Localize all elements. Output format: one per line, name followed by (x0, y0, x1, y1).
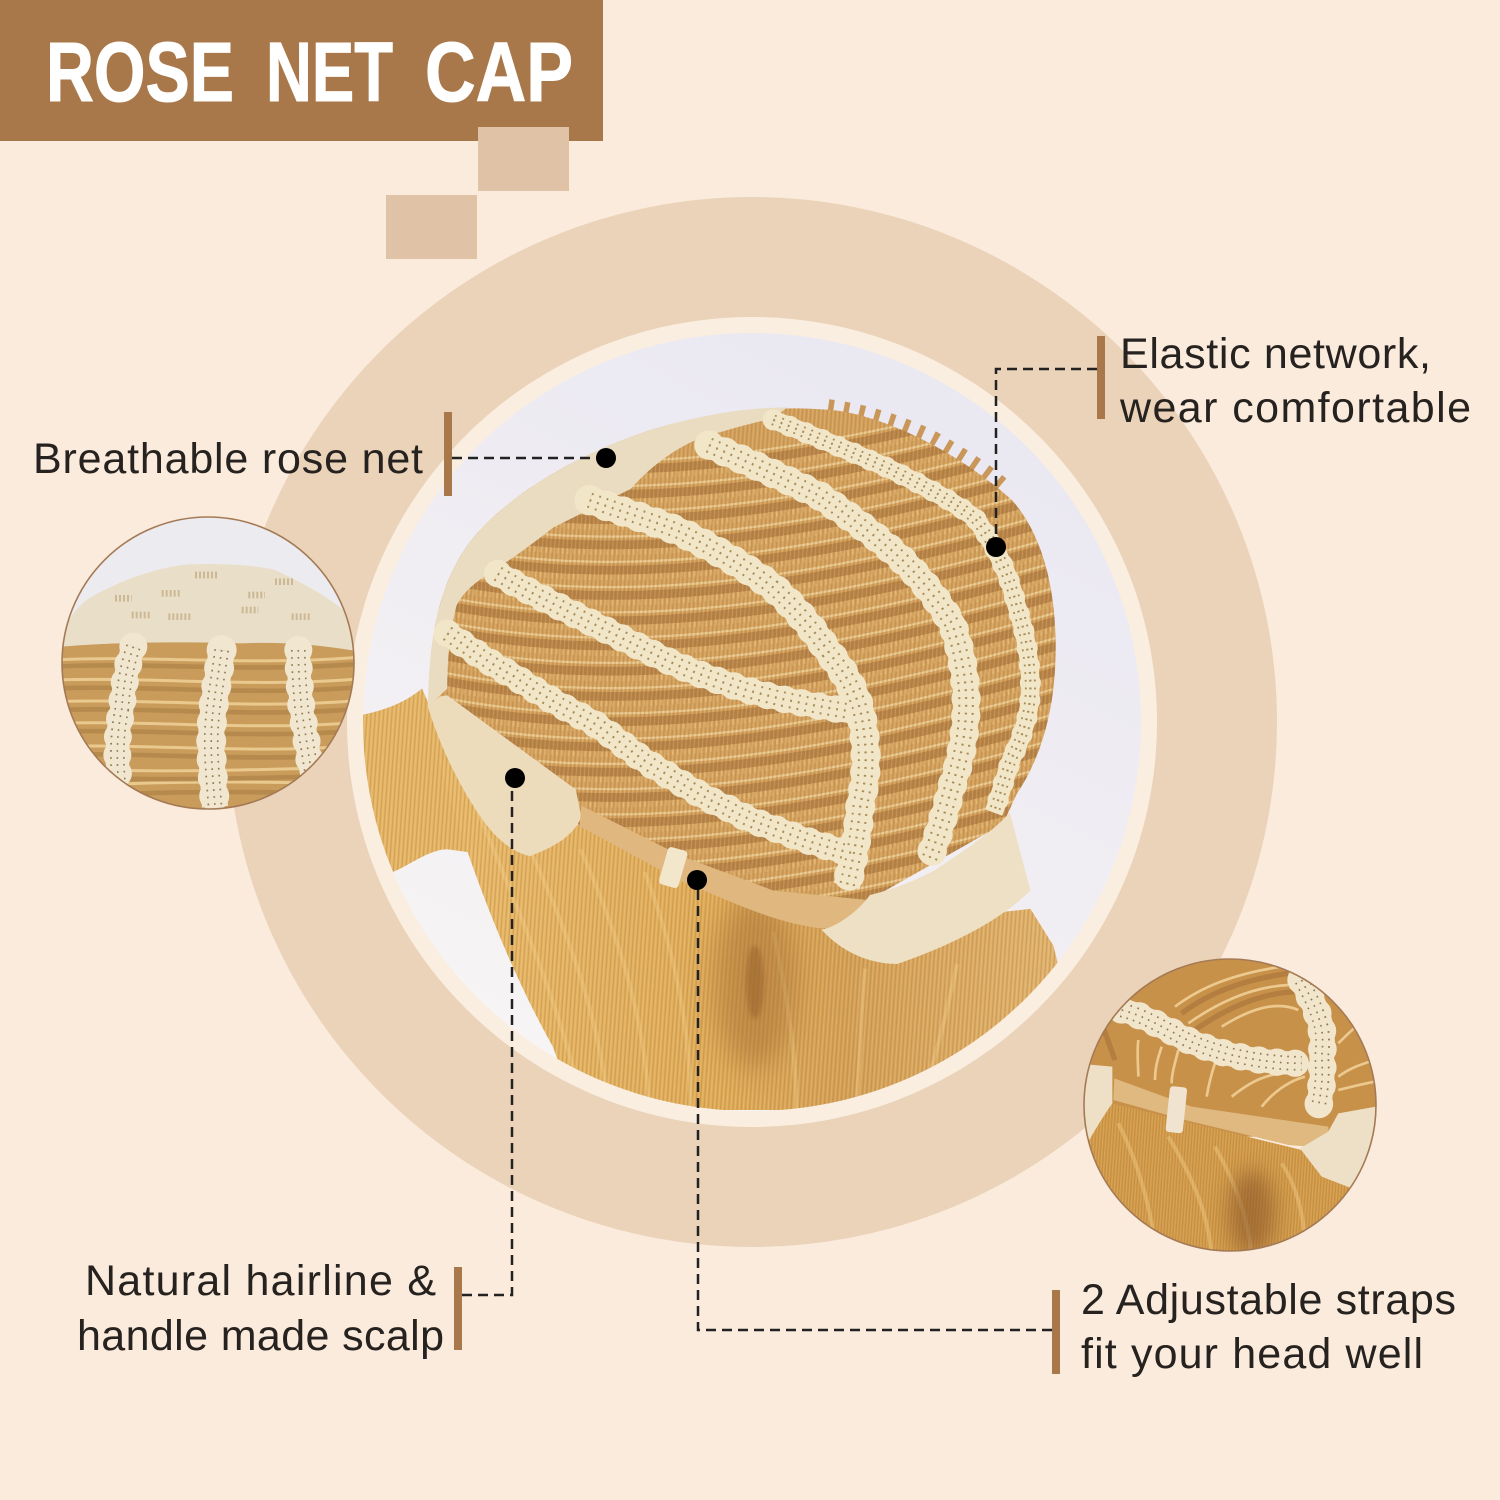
inset lace strips (117, 647, 312, 807)
title banner: NET (266, 25, 393, 119)
photo backdrop (360, 330, 1150, 1120)
callout: natural hairline: Natural hairline & (85, 1257, 436, 1305)
decorative squares (386, 127, 569, 259)
inset lace (62, 564, 360, 652)
inset lace strips (1122, 980, 1323, 1107)
callout: breathable rose net (33, 412, 616, 496)
hair lowlight (714, 895, 796, 1070)
inset: rose net detail (62, 518, 354, 808)
long hair (458, 780, 1058, 1110)
title banner (0, 0, 603, 141)
adjustable strap (579, 806, 865, 928)
inset strap (1113, 1078, 1330, 1148)
callout: breathable rose net: Breathable rose net (33, 435, 423, 483)
comb fringe (828, 406, 1007, 489)
callout: natural hairline: handle made scalp (77, 1312, 444, 1360)
strip: scallops (447, 420, 1030, 886)
cap base (429, 408, 1056, 927)
hairline scalp tab (428, 695, 581, 856)
rose net lace crown (428, 407, 787, 707)
callout: elastic network: wear comfortable (1119, 384, 1471, 432)
callout: natural hairline (77, 768, 525, 1360)
inset hair (1089, 1104, 1350, 1250)
inset wefts (1138, 967, 1375, 1107)
lace strips (447, 420, 1030, 886)
callout: elastic network: Elastic network, (1120, 330, 1431, 378)
ear tab (821, 812, 1030, 964)
callout: adjustable straps: 2 Adjustable straps (1081, 1276, 1456, 1324)
strip: punched holes (447, 420, 1030, 886)
title banner: CAP (425, 25, 573, 119)
inset tabs (1084, 1064, 1112, 1140)
callout: elastic network (986, 330, 1471, 557)
strap slider (658, 846, 688, 889)
callout: adjustable straps (687, 870, 1456, 1378)
cap wefts (430, 408, 1056, 901)
inset: strap detail (1085, 960, 1376, 1250)
decorative ring (227, 197, 1277, 1247)
strip: outer edge (447, 420, 1030, 886)
flyaway hair (363, 688, 468, 872)
inset hair wefts (62, 642, 354, 808)
inset border right (1084, 959, 1376, 1251)
callout: adjustable straps: fit your head well (1081, 1330, 1423, 1378)
main photo: wig cap (355, 330, 1150, 1120)
inset border left (62, 517, 354, 809)
title banner: ROSE (46, 25, 234, 119)
